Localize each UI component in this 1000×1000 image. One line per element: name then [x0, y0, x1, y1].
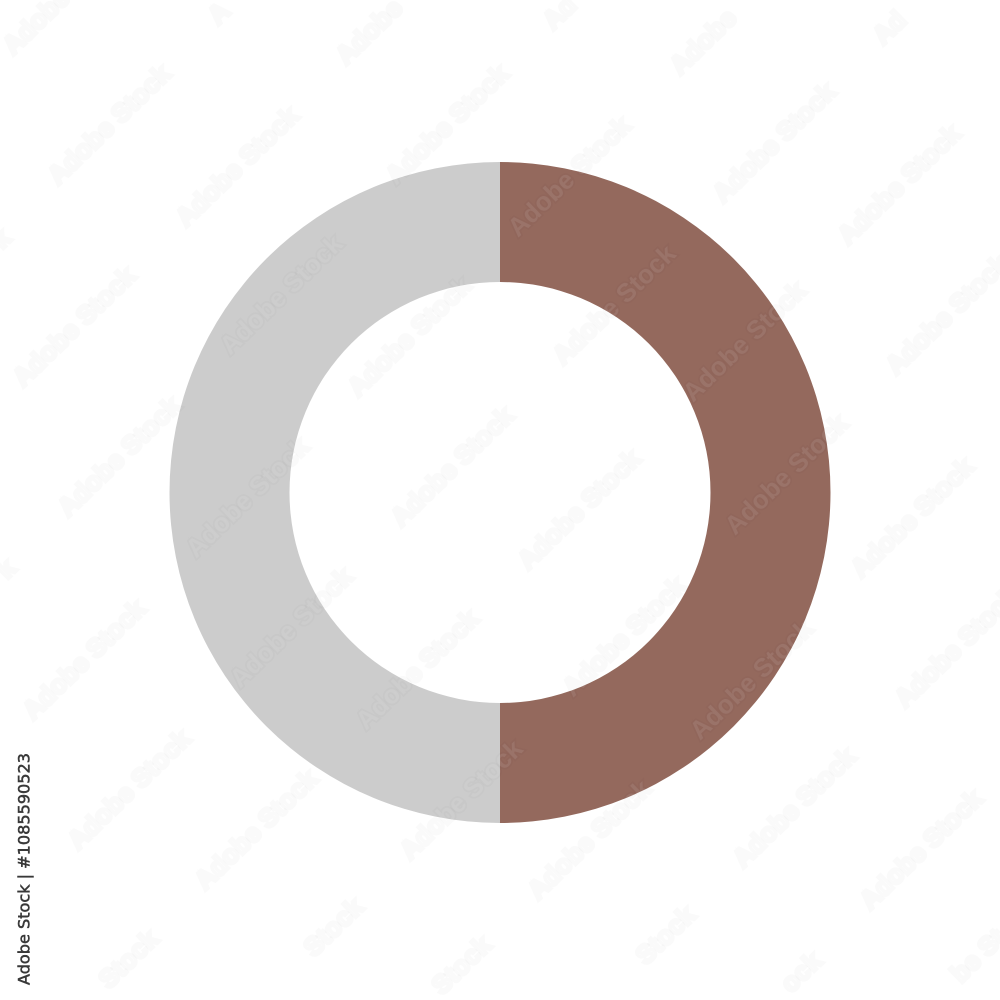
- watermark pattern: Adobe Stock: [726, 741, 862, 873]
- watermark pattern: Adobe Stock: [393, 733, 529, 865]
- watermark pattern: Adobe Stock: [169, 100, 305, 232]
- watermark pattern: Adobe Stock: [853, 783, 989, 915]
- watermark pattern: Adobe Stock: [179, 431, 315, 563]
- watermark pattern: Adobe Stock: [6, 260, 142, 392]
- donut chart: [169, 162, 830, 823]
- watermark pattern: Stock: [425, 929, 497, 1000]
- watermark pattern: ock: [774, 945, 828, 998]
- watermark pattern: Adobe Stock: [41, 58, 177, 190]
- watermark pattern: Ad: [866, 5, 912, 50]
- watermark pattern: Adobe Stock: [683, 613, 819, 745]
- watermark pattern: Adobe Stock: [341, 270, 477, 402]
- watermark pattern: Adobe Stock: [379, 58, 515, 190]
- watermark pattern: Adobe Stock: [501, 110, 637, 242]
- watermark pattern: Adobe Stock: [61, 723, 197, 855]
- watermark pattern: Adobe Stock: [676, 275, 812, 407]
- watermark pattern: Adobe Stock: [706, 76, 842, 208]
- watermark pattern: Adobe Stock: [384, 400, 520, 532]
- watermark pattern: Adobe Stock: [223, 561, 359, 693]
- watermark pattern: Stock: [297, 891, 369, 962]
- watermark pattern: Stock: [629, 899, 701, 970]
- watermark pattern: Stock: [92, 923, 164, 994]
- segment: brown half: [500, 162, 830, 823]
- watermark pattern: Adobe Stock: [188, 763, 324, 895]
- watermark pattern: Adobe Stock: [51, 390, 187, 522]
- watermark pattern: Adobe Stock: [521, 773, 657, 905]
- stock id: Adobe Stock | #1085590523: [14, 753, 33, 985]
- watermark pattern: Adobe Stock: [556, 570, 692, 702]
- watermark pattern: Adobe Stock: [511, 443, 647, 575]
- watermark pattern: Adobe Stock: [16, 593, 152, 725]
- watermark pattern: Adobe: [663, 3, 742, 80]
- watermark pattern: Adobe Stock: [718, 408, 854, 540]
- watermark pattern: Adobe Stock: [831, 118, 967, 250]
- watermark pattern: Adobe Stock: [546, 238, 682, 370]
- segment: grey half: [169, 162, 500, 823]
- watermark pattern: Adobe Stock: [349, 603, 485, 735]
- watermark pattern: Adobe Stock: [213, 228, 349, 360]
- watermark pattern: Adobe Stock: [844, 451, 980, 583]
